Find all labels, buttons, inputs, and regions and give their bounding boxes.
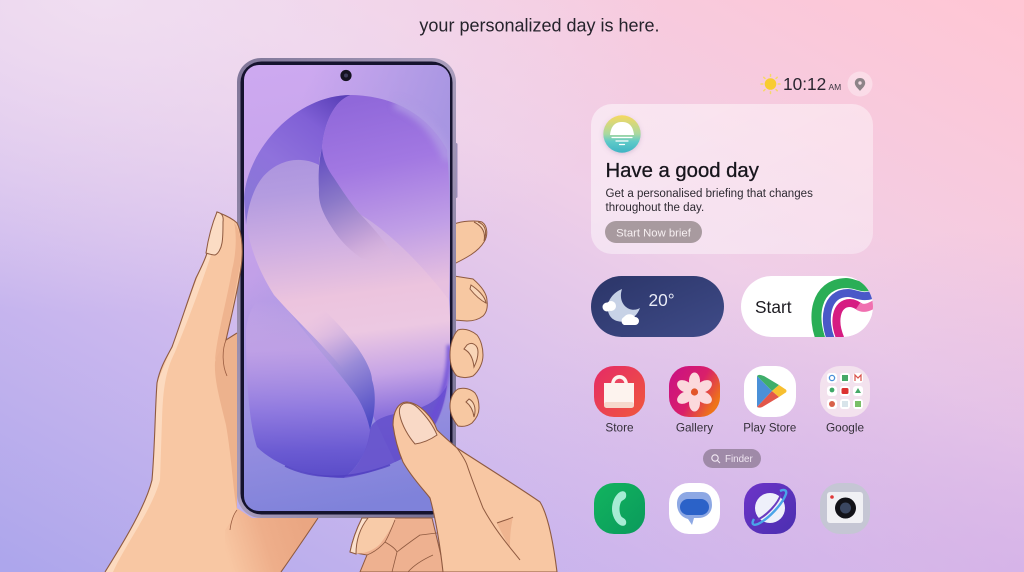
phone side button [454, 143, 458, 198]
app: Phone [594, 483, 645, 534]
icon: moon and clouds [602, 289, 640, 325]
status row: sun, time, location [761, 72, 872, 96]
widget: weather [591, 276, 724, 337]
widget: Start [741, 276, 873, 337]
phone frame [237, 58, 456, 518]
icon: sun [761, 74, 780, 94]
icon: shopping bag [604, 375, 634, 408]
button: Start Now brief [605, 221, 702, 243]
left thumb nail [206, 212, 223, 255]
right thumb nail [399, 403, 437, 444]
icon: rainbow heart [816, 283, 880, 342]
icon: location pin [848, 72, 872, 96]
temperature: 20° [648, 290, 675, 310]
app: Store [594, 366, 645, 434]
app: Gallery [669, 366, 720, 434]
card body text: throughout the day. [606, 202, 704, 214]
phone screen wallpaper [244, 65, 450, 511]
icon: mini app grid [827, 373, 863, 409]
camera punch-hole [340, 70, 352, 81]
icon: chat bubble [677, 492, 712, 525]
icon: play triangle [757, 375, 786, 408]
icon: flower [675, 372, 714, 412]
right hand thumb and palm [393, 402, 557, 572]
icon: sunrise badge [603, 115, 641, 153]
search pill: Finder [703, 449, 761, 468]
time: 10:12 [783, 74, 826, 94]
panel: briefing card [591, 104, 873, 254]
start label: Start [755, 297, 792, 317]
right hand lower fingers [350, 518, 445, 572]
app: Google folder [820, 366, 870, 434]
search pill: Finder: Finder [725, 454, 754, 465]
icon: handset [612, 491, 626, 526]
icon: lens [827, 492, 863, 523]
app: Store: Store [605, 420, 634, 434]
illustration: hands holding phone [105, 58, 557, 572]
left hand [105, 212, 318, 572]
app: Internet [744, 483, 796, 534]
lower fingers over phone edge [450, 329, 483, 426]
app: Gallery: Gallery [676, 420, 713, 434]
app: Play Store [743, 366, 796, 434]
app: Camera [820, 483, 870, 534]
app: Messages [669, 483, 720, 534]
am label: AM [828, 82, 841, 92]
app: Google folder: Google [826, 420, 864, 434]
app grid [594, 366, 870, 534]
phone [237, 58, 458, 518]
app: Play Store: Play Store [743, 422, 796, 434]
icon: planet [753, 490, 786, 525]
upper fingers behind phone [454, 221, 487, 321]
card heading: Have a good day [606, 160, 760, 182]
card body text: Get a personalised briefing that changes [606, 188, 813, 200]
title text: your personalized day is here. [419, 16, 660, 36]
button: Start Now brief: Start Now brief [616, 227, 692, 239]
